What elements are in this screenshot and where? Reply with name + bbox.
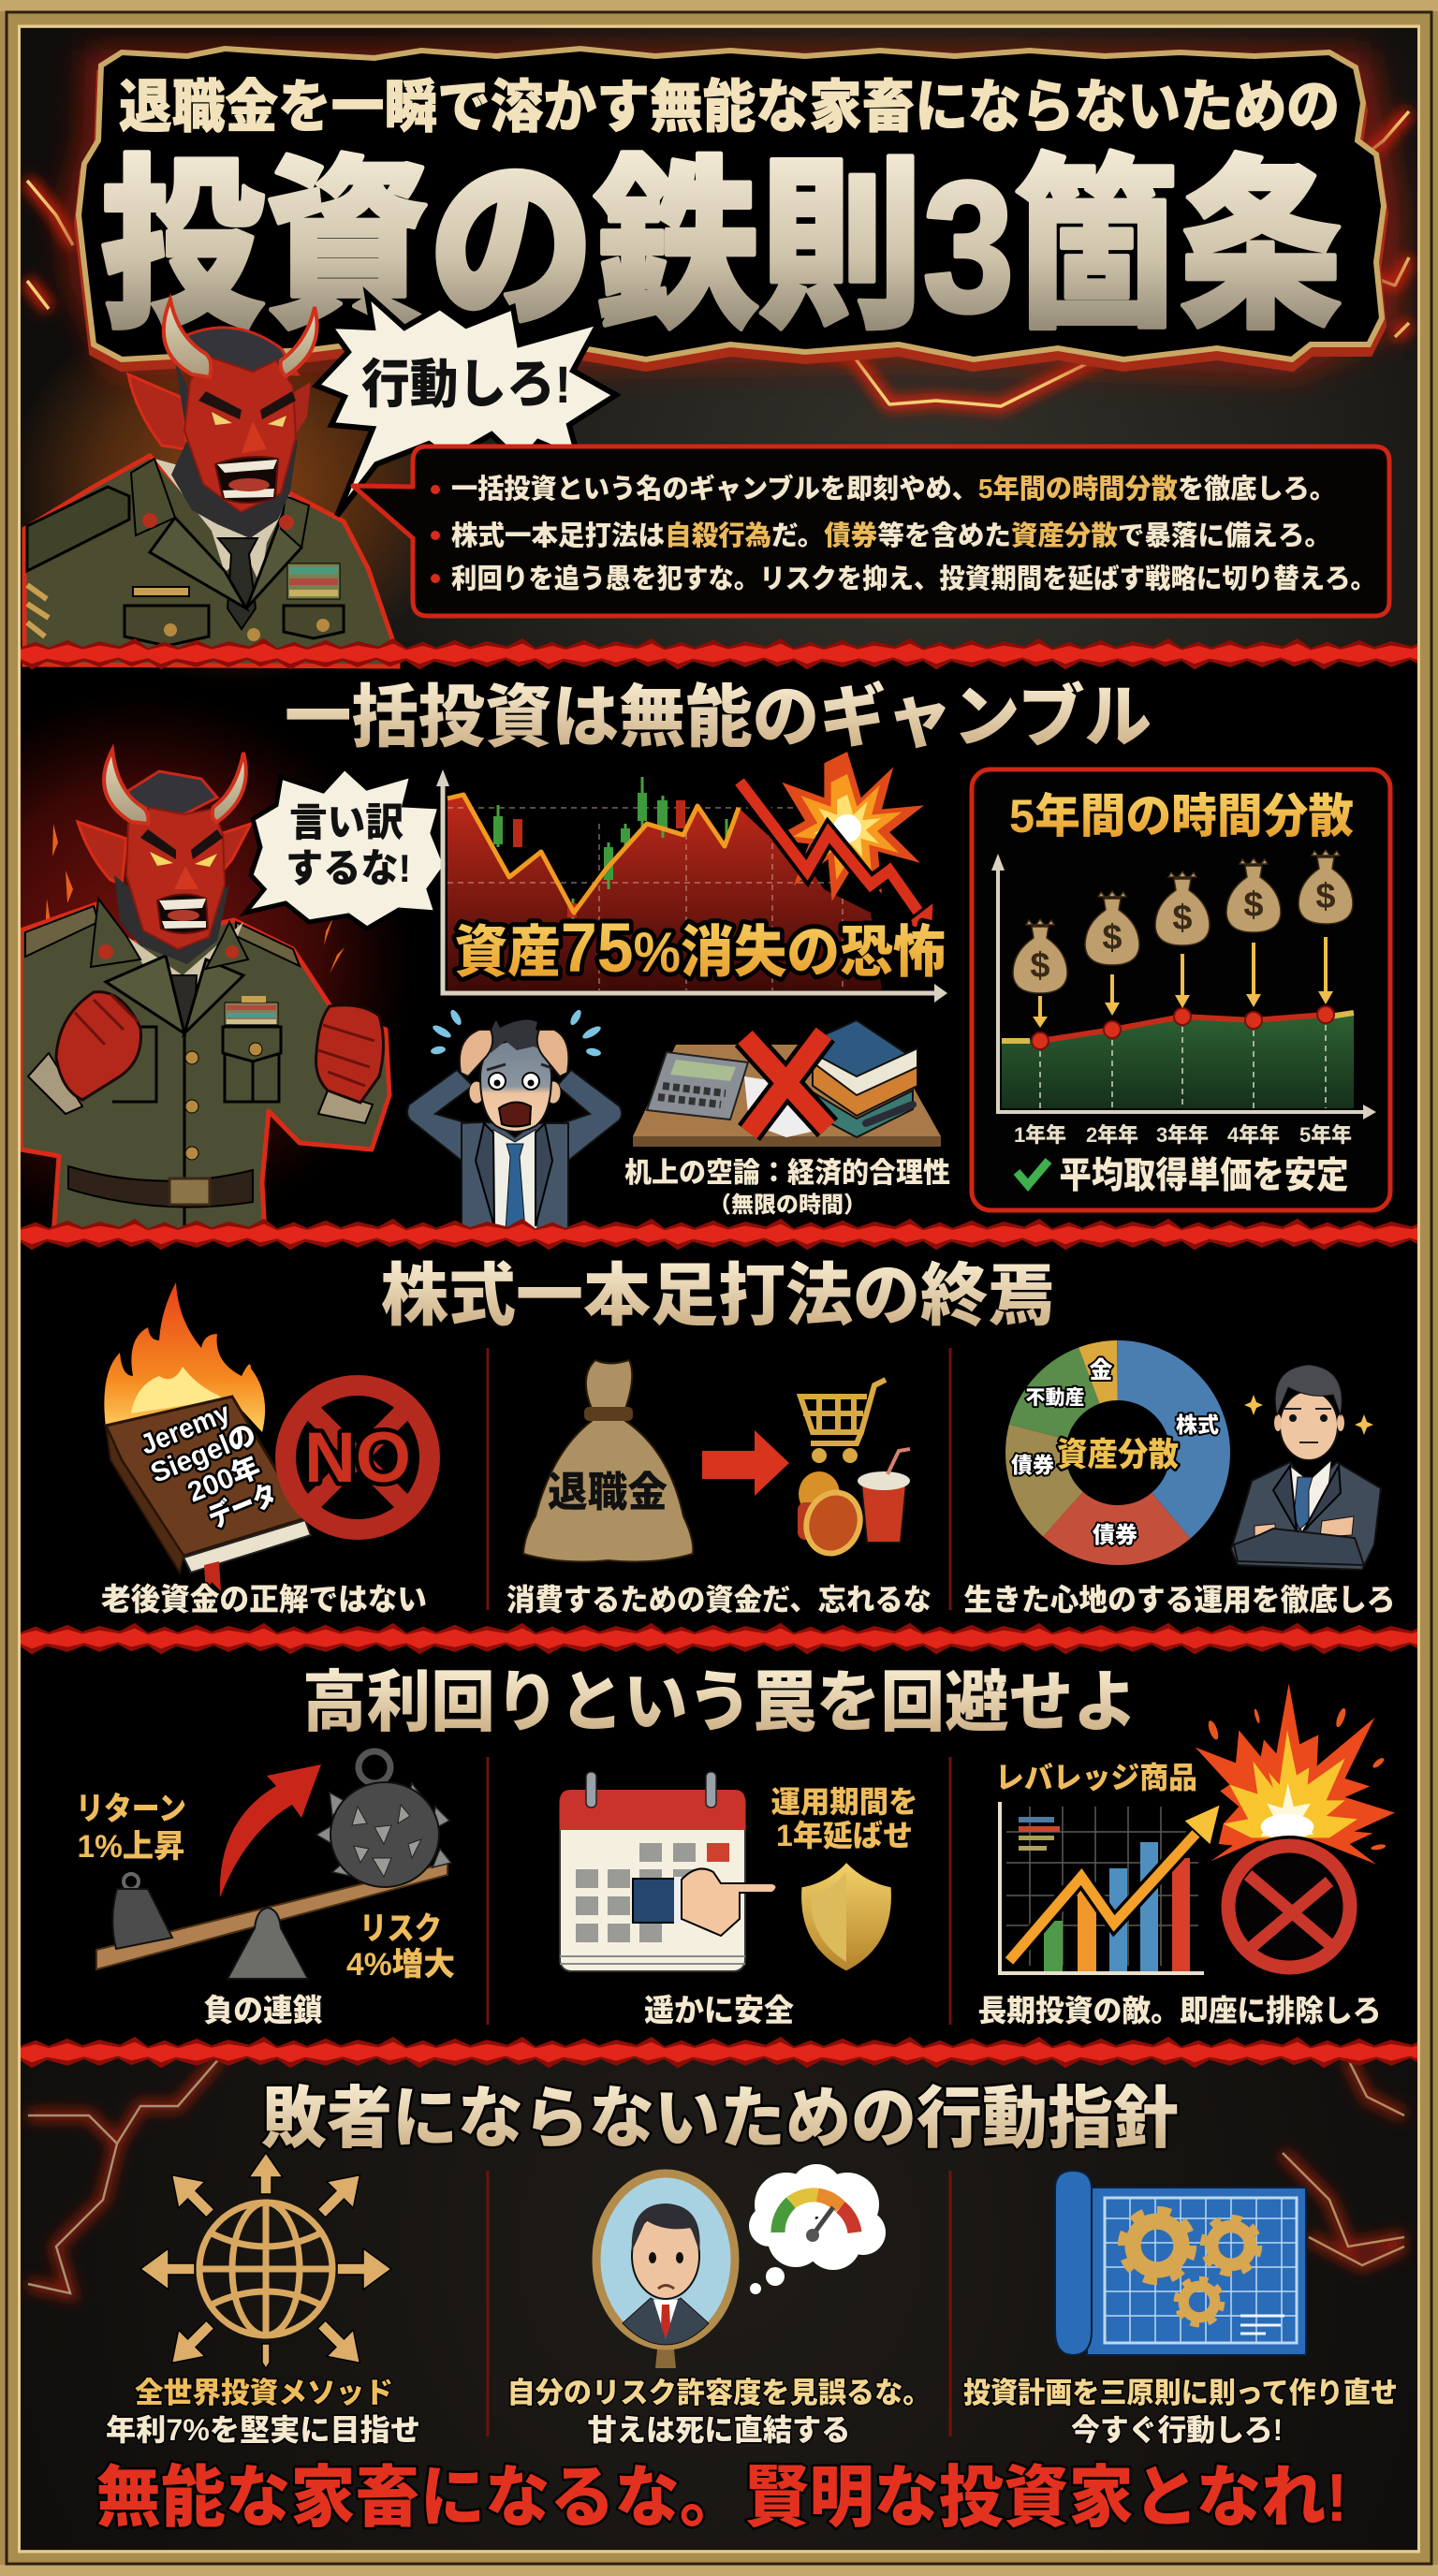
section 3 heading: 高利回りという罠を回避せよ bbox=[302, 1666, 1137, 1740]
right ear bbox=[292, 382, 311, 440]
panel title: 5年間の時間分散 bbox=[1009, 790, 1354, 842]
pockets and buttons bbox=[27, 585, 344, 646]
rising zigzag arrow bbox=[1009, 1821, 1208, 1961]
year labels: 5年年 bbox=[1299, 1123, 1352, 1147]
shoulders bbox=[623, 2298, 709, 2345]
suit bbox=[1231, 1462, 1381, 1570]
dollar signs: $ bbox=[1102, 918, 1123, 958]
lapels bbox=[150, 505, 301, 608]
lapels bbox=[476, 1123, 552, 1226]
lightning: bottom section bbox=[28, 2057, 1404, 2293]
panel: three-line summary bbox=[353, 446, 1389, 616]
face bbox=[480, 1041, 551, 1132]
right ear bbox=[217, 824, 251, 871]
caption: sleep-well management: 生きた心地のする運用を徹底しろ bbox=[964, 1583, 1395, 1617]
books bbox=[799, 1020, 917, 1137]
confident man bbox=[1231, 1365, 1381, 1570]
tie bbox=[1294, 1477, 1313, 1530]
flames bbox=[104, 1282, 265, 1432]
prohibited sign bbox=[1228, 1846, 1350, 1968]
torso bbox=[462, 1122, 568, 1236]
cost dots bbox=[1032, 1006, 1334, 1049]
gold bar bbox=[133, 587, 189, 596]
donut center: 資産分散 bbox=[1057, 1437, 1179, 1473]
lapels bbox=[1273, 1466, 1341, 1531]
fulcrum bbox=[227, 1908, 308, 1979]
red X bbox=[745, 1033, 828, 1133]
donut labels: 金 bbox=[1089, 1357, 1113, 1383]
caption sub: （無限の時間） bbox=[709, 1193, 866, 1218]
beard bbox=[114, 875, 229, 964]
shirt bbox=[1290, 1460, 1331, 1535]
caption: risk tolerance: 甘えは死に直結する bbox=[588, 2413, 850, 2447]
brow and eyes bbox=[198, 391, 296, 427]
book text: データ bbox=[204, 1478, 282, 1534]
label extend: 1年延ばせ bbox=[776, 1819, 913, 1852]
left ear bbox=[128, 374, 187, 449]
book text: Jeremy bbox=[136, 1398, 235, 1461]
dish bbox=[798, 1485, 869, 1561]
book text: Siegelの bbox=[146, 1419, 260, 1489]
green area bbox=[1002, 1013, 1354, 1108]
ears bbox=[469, 1081, 484, 1104]
label extend bbox=[771, 1785, 917, 1852]
ears bbox=[1274, 1414, 1282, 1431]
jagged section dividers bbox=[19, 638, 1438, 2068]
desk bbox=[633, 1045, 941, 1147]
shopping cart bbox=[800, 1380, 886, 1460]
frame and grid bbox=[1105, 2198, 1297, 2343]
horns bbox=[164, 300, 317, 377]
panicking man bbox=[407, 1008, 622, 1236]
face features bbox=[1284, 1409, 1331, 1442]
caption: negative chain: 負の連鎖 bbox=[204, 1993, 322, 2027]
dollar signs: $ bbox=[1315, 877, 1336, 916]
fast food bbox=[798, 1449, 910, 1561]
dollar signs: $ bbox=[1172, 899, 1193, 938]
bag tie bbox=[584, 1407, 633, 1421]
ribbon bbox=[204, 1561, 221, 1593]
crash chart bbox=[436, 752, 947, 1003]
left fist bbox=[56, 992, 141, 1100]
book pages bbox=[183, 1520, 311, 1573]
section 1 heading: 一括投資は無能のギャンブル bbox=[285, 680, 1152, 755]
mace ball bbox=[316, 1751, 451, 1887]
mouth bbox=[215, 457, 278, 503]
eyes bbox=[487, 1064, 558, 1090]
red arrow bbox=[702, 1430, 789, 1496]
hands bbox=[460, 1030, 568, 1076]
money bags bbox=[1013, 850, 1353, 993]
mouth bbox=[499, 1102, 531, 1127]
paper bbox=[744, 1076, 829, 1137]
caption: enemy of long term: 長期投資の敵。即座に排除しろ bbox=[977, 1994, 1382, 2027]
bullets bbox=[431, 485, 440, 583]
leverage explosion bbox=[1196, 1683, 1395, 1865]
label risk bbox=[346, 1911, 455, 1983]
brow and eyes bbox=[140, 829, 223, 867]
cuffs bbox=[28, 1053, 373, 1123]
label return: リターン bbox=[76, 1792, 186, 1827]
bubble text: 行動しろ! bbox=[361, 355, 571, 414]
tie bbox=[506, 1144, 525, 1231]
line 1: 一括投資という名のギャンブルを即刻やめ、5年間の時間分散を徹底しろ。 bbox=[451, 473, 1336, 505]
dollar signs: $ bbox=[1243, 886, 1264, 925]
panel box with tail bbox=[353, 446, 1389, 616]
speech bubble: no excuses bbox=[245, 768, 446, 929]
orange line bbox=[448, 795, 739, 913]
hair bbox=[1275, 1365, 1342, 1415]
caption: spending money: 消費するための資金だ、忘れるな bbox=[506, 1583, 932, 1617]
pointing hand bbox=[633, 1868, 777, 1936]
pockets and buttons bbox=[112, 1027, 281, 1236]
hair bbox=[124, 771, 217, 814]
red curved arrow bbox=[220, 1764, 321, 1897]
cloud bbox=[749, 2164, 886, 2294]
donut labels: 株式 bbox=[1176, 1412, 1219, 1437]
horns bbox=[104, 750, 246, 824]
crossed arm bbox=[1234, 1529, 1364, 1565]
burger bbox=[799, 1471, 840, 1516]
asset allocation donut bbox=[1011, 1357, 1219, 1548]
stable cost text: 平均取得単価を安定 bbox=[1060, 1156, 1348, 1196]
globe with arrows bbox=[140, 2153, 391, 2377]
down arrows bbox=[1033, 937, 1333, 1028]
gridlines bbox=[448, 808, 843, 990]
book text: 200年 bbox=[183, 1452, 265, 1508]
donut labels bbox=[1011, 1357, 1219, 1548]
hair bbox=[632, 2203, 700, 2251]
hair bbox=[491, 1020, 550, 1053]
title line 1: 退職金を一瞬で溶かす無能な家畜にならないための bbox=[119, 75, 1340, 139]
area bbox=[448, 795, 882, 990]
shirt bbox=[126, 922, 243, 1030]
donut labels: 不動産 bbox=[1026, 1387, 1084, 1409]
lightning: header bbox=[27, 111, 1409, 406]
donut labels: 債券 bbox=[1011, 1453, 1054, 1477]
caption: redo plan: 今すぐ行動しろ! bbox=[1071, 2413, 1283, 2447]
gauge bbox=[778, 2195, 855, 2232]
face bbox=[632, 2213, 699, 2299]
handle bbox=[655, 2340, 676, 2368]
section 4 heading: 敗者にならないための行動指針 bbox=[261, 2082, 1179, 2157]
explosion bbox=[770, 752, 924, 901]
cup bbox=[861, 1484, 906, 1543]
left ear bbox=[78, 822, 126, 885]
mirror bbox=[596, 2174, 735, 2368]
calculator bbox=[647, 1052, 748, 1120]
crash arrow bbox=[740, 782, 922, 917]
column dividers section 4 bbox=[488, 2171, 950, 2437]
column dividers section 2 bbox=[488, 1348, 950, 1610]
column dividers section 3 bbox=[488, 1757, 950, 2025]
caption: global method bbox=[106, 2377, 420, 2447]
retirement money bag bbox=[523, 1360, 693, 1561]
label return: 1%上昇 bbox=[77, 1829, 185, 1865]
gold shield bbox=[800, 1861, 892, 1972]
label extend: 運用期間を bbox=[771, 1785, 917, 1819]
shirt bbox=[492, 1130, 537, 1231]
hair bbox=[183, 328, 298, 374]
caption: global method: 全世界投資メソッド bbox=[135, 2377, 393, 2409]
year labels: 1年年 bbox=[1014, 1123, 1066, 1147]
belt bbox=[68, 1166, 253, 1208]
tie bbox=[218, 538, 257, 629]
candles bbox=[493, 777, 726, 922]
title plate bbox=[79, 49, 1384, 367]
face bbox=[126, 808, 225, 949]
collar tabs bbox=[91, 899, 248, 969]
axes bbox=[443, 782, 936, 993]
caption: not the answer: 老後資金の正解ではない bbox=[101, 1582, 427, 1617]
year labels: 4年年 bbox=[1227, 1123, 1280, 1147]
frame bbox=[596, 2174, 735, 2346]
head bbox=[1280, 1391, 1338, 1460]
donut labels: 債券 bbox=[1093, 1523, 1137, 1548]
speech bubble: action bbox=[316, 294, 616, 516]
nose bbox=[174, 866, 198, 889]
spec lines bbox=[1240, 2316, 1284, 2334]
thought cloud with gauge bbox=[749, 2164, 886, 2294]
caption: risk tolerance bbox=[507, 2377, 931, 2447]
desk caption bbox=[624, 1158, 950, 1218]
grid bbox=[1006, 1807, 1198, 1966]
check mark bbox=[1017, 1161, 1049, 1185]
NO text: NO bbox=[304, 1418, 411, 1498]
devil commander 1 bbox=[24, 300, 398, 666]
axes bbox=[1000, 1802, 1204, 1973]
mouth bbox=[157, 894, 208, 933]
caption: global method: 年利7%を堅実に目指せ bbox=[106, 2413, 420, 2447]
caption: risk tolerance: 自分のリスク許容度を見誤るな。 bbox=[507, 2377, 931, 2409]
globe bbox=[199, 2203, 332, 2335]
book text bbox=[135, 1391, 285, 1548]
bars bbox=[1044, 1842, 1190, 1972]
jacket and arms bbox=[21, 904, 389, 1236]
dashed drop lines bbox=[1040, 1015, 1326, 1108]
roll bbox=[1055, 2171, 1092, 2355]
epaulets bbox=[25, 906, 300, 966]
back hair and beard bbox=[171, 360, 298, 538]
gears bbox=[1123, 2212, 1191, 2279]
chart caption: 資産75%消失の恐怖 bbox=[455, 909, 946, 987]
caption: redo plan bbox=[963, 2377, 1398, 2447]
label risk: リスク bbox=[360, 1911, 442, 1947]
shoulder epaulet bbox=[27, 487, 129, 571]
date cells bbox=[576, 1843, 696, 1942]
embers bbox=[45, 824, 345, 973]
pen bbox=[866, 1105, 913, 1123]
dollar signs bbox=[1030, 877, 1336, 986]
caption: far safer: 遥かに安全 bbox=[644, 1993, 794, 2027]
label leverage: レバレッジ商品 bbox=[995, 1761, 1197, 1794]
dollar signs: $ bbox=[1030, 946, 1050, 986]
bubble line 2: するな! bbox=[286, 846, 411, 890]
jacket bbox=[24, 456, 398, 666]
hands bbox=[1255, 1516, 1354, 1544]
face bbox=[184, 356, 296, 512]
lid bbox=[858, 1471, 910, 1490]
sheet bbox=[1087, 2188, 1306, 2355]
right fist bbox=[316, 1005, 384, 1103]
sweat bbox=[430, 1008, 603, 1057]
label risk: 4%増大 bbox=[346, 1947, 455, 1983]
no sign bbox=[286, 1385, 430, 1530]
sparkles bbox=[1244, 1395, 1373, 1435]
arrows bbox=[140, 2153, 391, 2377]
calendar header bbox=[560, 1790, 745, 1830]
calendar bbox=[560, 1772, 777, 1971]
year labels: 3年年 bbox=[1156, 1123, 1209, 1147]
legend bars bbox=[1019, 1817, 1060, 1851]
blueprint bbox=[1055, 2171, 1306, 2355]
closing call to action: 無能な家畜になるな。賢明な投資家となれ! bbox=[95, 2461, 1348, 2536]
desk with books crossed out bbox=[633, 1020, 941, 1147]
label return bbox=[76, 1792, 186, 1865]
line 3: 利回りを追う愚を犯すな。リスクを抑え、投資期間を延ばす戦略に切り替えろ。 bbox=[451, 563, 1376, 594]
average cost line bbox=[1040, 1015, 1326, 1041]
book spine bbox=[106, 1426, 183, 1573]
seesaw illustration bbox=[76, 1751, 455, 1983]
rings bbox=[586, 1772, 716, 1808]
leverage chart bbox=[1000, 1802, 1221, 1973]
bubble line 1: 言い訳 bbox=[289, 800, 404, 844]
collar tabs bbox=[131, 459, 309, 548]
medal ribbons bbox=[287, 564, 340, 599]
lapels bbox=[106, 956, 243, 1033]
plank bbox=[96, 1863, 448, 1969]
weight bbox=[112, 1874, 172, 1949]
nose bbox=[242, 421, 267, 453]
line 2: 株式一本足打法は自殺行為だ。債券等を含めた資産分散で暴落に備えろ。 bbox=[451, 520, 1331, 551]
devil commander 2 bbox=[21, 750, 389, 1236]
axes bbox=[998, 866, 1365, 1112]
year labels: 2年年 bbox=[1086, 1123, 1138, 1147]
burning book bbox=[104, 1282, 311, 1593]
section 2 heading: 株式一本足打法の終焉 bbox=[381, 1258, 1055, 1334]
tie bbox=[171, 975, 197, 1033]
medal ribbons bbox=[225, 996, 278, 1025]
panel: time diversification bbox=[972, 769, 1390, 1210]
features bbox=[649, 2252, 683, 2289]
bag text: 退職金 bbox=[548, 1470, 668, 1515]
book cover bbox=[106, 1397, 305, 1556]
desk caption: 机上の空論：経済的合理性 bbox=[624, 1158, 950, 1189]
caption: redo plan: 投資計画を三原則に則って作り直せ bbox=[963, 2377, 1398, 2409]
title block bbox=[79, 49, 1384, 367]
arms bbox=[407, 1070, 622, 1161]
shirt collar bbox=[154, 459, 290, 585]
year labels bbox=[1014, 1123, 1352, 1147]
